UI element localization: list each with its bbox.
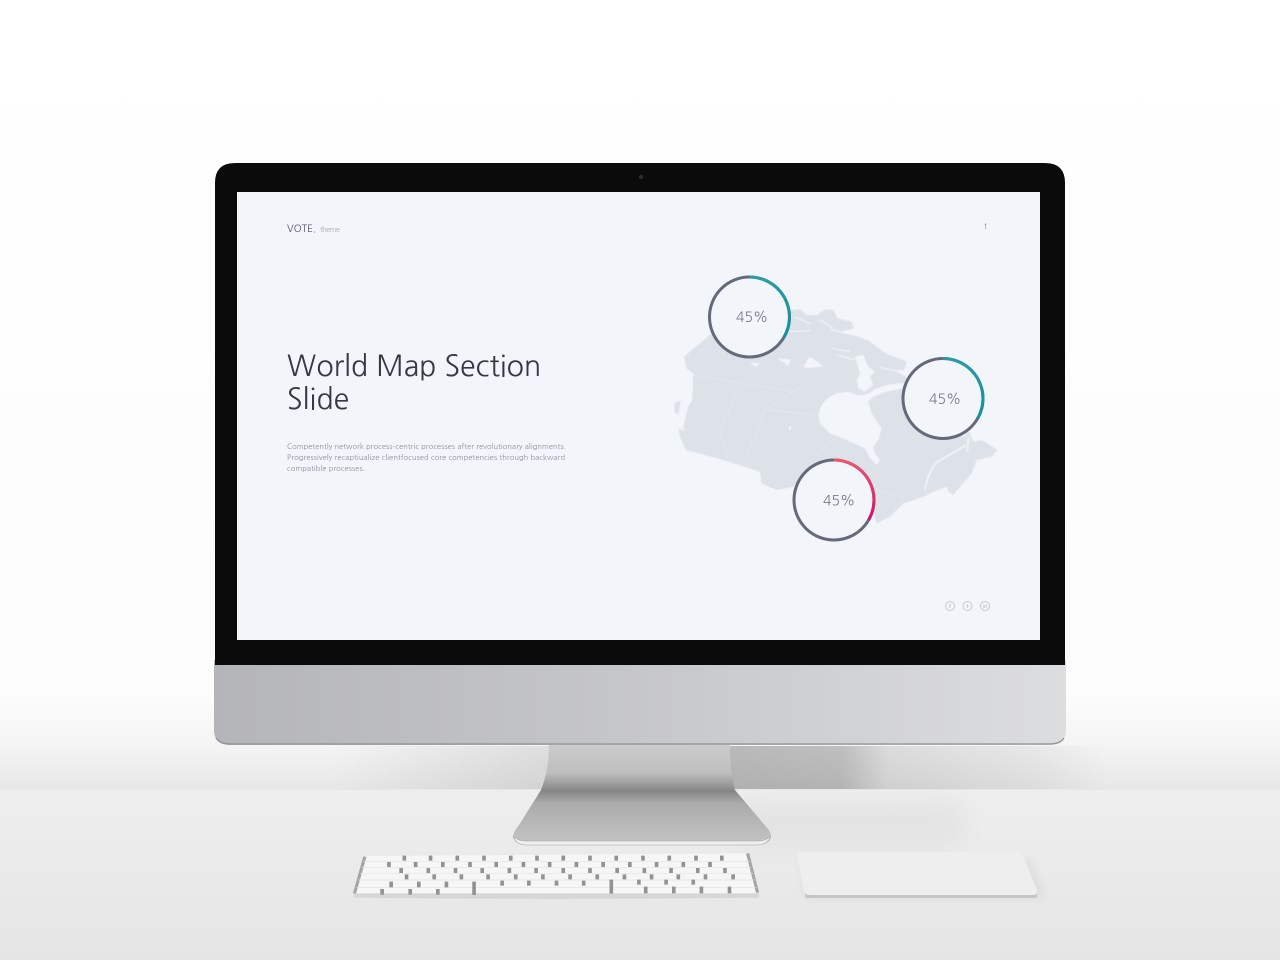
title bbox=[287, 353, 541, 414]
circle stat 1 bbox=[710, 277, 790, 357]
body paragraph: compatible processes. bbox=[287, 465, 365, 473]
background: desk bbox=[0, 790, 1280, 960]
trackpad bbox=[797, 852, 1045, 898]
map of Canada bbox=[674, 309, 997, 523]
province borders bbox=[693, 375, 903, 497]
monitor bezel bbox=[215, 163, 1065, 665]
chin bottom edge bbox=[216, 738, 1064, 744]
body paragraph bbox=[287, 443, 566, 473]
monitor chin bbox=[214, 660, 1066, 745]
keyboard body bbox=[354, 853, 759, 893]
Vancouver Island bbox=[678, 428, 691, 451]
gulf of St Lawrence bbox=[925, 437, 968, 490]
trackpad cast shadow bbox=[800, 860, 1045, 898]
Foxe Basin bbox=[855, 355, 875, 392]
keyboard side edges bbox=[354, 853, 758, 893]
Hudson Bay and James Bay bbox=[818, 383, 903, 465]
mainland and arctic islands bbox=[683, 309, 997, 523]
icon: facebook: f bbox=[949, 603, 951, 609]
trackpad bottom edge bbox=[805, 893, 1037, 898]
title: Slide bbox=[287, 386, 349, 414]
keyboard bbox=[354, 853, 759, 899]
circle stat 2 bbox=[903, 358, 983, 438]
brand theme word: theme bbox=[320, 226, 340, 234]
stand shadow on desk bbox=[735, 800, 965, 845]
title: World Map Section bbox=[287, 353, 541, 381]
social icons bbox=[946, 602, 990, 610]
keyboard key gaps bbox=[382, 856, 733, 895]
monitor bbox=[214, 163, 1066, 745]
body paragraph: Competently network process-centric processes after revolutionary alignments. bbox=[287, 443, 566, 451]
stand neck and foot bbox=[513, 745, 771, 845]
screen bbox=[237, 192, 1040, 640]
arctic channels bbox=[788, 317, 906, 373]
circle stat 2: 45% bbox=[929, 393, 961, 407]
trackpad top bbox=[797, 852, 1037, 895]
Haida Gwaii bbox=[674, 401, 681, 415]
keyboard base band bbox=[354, 893, 759, 899]
stand shadow on wall, right bbox=[728, 746, 1108, 789]
northern lakes and channels bbox=[750, 357, 823, 432]
monitor stand bbox=[513, 745, 771, 845]
webcam bbox=[639, 175, 643, 179]
stand shadow on wall, left bbox=[330, 746, 550, 789]
brand label: VOTE. bbox=[287, 224, 316, 234]
stand foot edge bbox=[513, 836, 771, 845]
circle stat 3: 45% bbox=[823, 494, 855, 508]
circle stat 3 bbox=[794, 460, 874, 540]
page number: 1 bbox=[984, 224, 988, 231]
icon: linkedin: in bbox=[983, 604, 987, 609]
keyboard row lines bbox=[356, 861, 757, 887]
circle stat 1: 45% bbox=[736, 311, 768, 325]
slide content bbox=[287, 224, 997, 610]
icon: twitter: t bbox=[966, 603, 968, 609]
body paragraph: Progressively recaptiualize clientfocused core competencies through backward bbox=[287, 454, 565, 462]
